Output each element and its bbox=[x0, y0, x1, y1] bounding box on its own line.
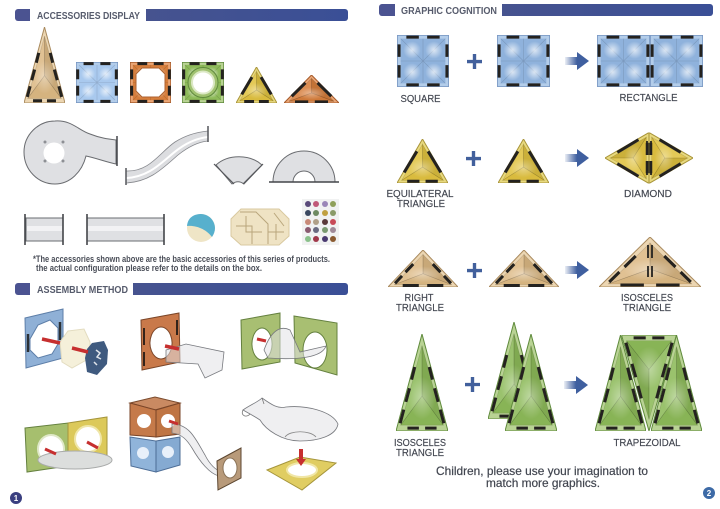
tile: blue square bbox=[76, 62, 118, 103]
label: isosceles triangle: ISOSCELES bbox=[621, 293, 673, 304]
tile: diamond of two triangles bbox=[605, 132, 693, 184]
label: isosceles triangle bbox=[621, 293, 673, 314]
tile: right triangle bbox=[388, 250, 458, 287]
step: orange frame with tube bbox=[141, 313, 224, 378]
tile: green ring frame bbox=[182, 62, 224, 103]
tile: orange right triangle bbox=[284, 75, 339, 103]
accessory: long straight tube bbox=[87, 214, 164, 245]
tile: yellow triangle bbox=[236, 67, 277, 103]
label: diamond: DIAMOND bbox=[624, 189, 672, 200]
panel: accessories display bbox=[15, 9, 348, 273]
label: equilateral triangle: TRIANGLE bbox=[397, 199, 445, 210]
tile: rectangle of two squares bbox=[597, 35, 703, 87]
row: triangles make diamond bbox=[386, 132, 693, 210]
label: equilateral triangle bbox=[386, 189, 454, 210]
label: right triangle: RIGHT bbox=[404, 293, 434, 304]
step: stacked cube with slide bbox=[130, 397, 241, 490]
heading: accessories display: ACCESSORIES DISPLAY bbox=[37, 10, 140, 22]
arrow bbox=[565, 261, 589, 279]
arrow bbox=[564, 376, 588, 394]
label: trapezoidal: TRAPEZOIDAL bbox=[614, 438, 681, 449]
label: isosceles triangle: TRIANGLE bbox=[396, 448, 444, 459]
label: rectangle: RECTANGLE bbox=[620, 93, 678, 104]
label: isosceles triangle bbox=[394, 438, 446, 459]
tile: large isosceles triangle bbox=[599, 237, 701, 287]
label: isosceles triangle: ISOSCELES bbox=[394, 438, 446, 449]
note: configuration disclaimer: *The accessories shown above are the basic accessories of this series of products. bbox=[33, 254, 330, 264]
panel: graphic cognition bbox=[379, 4, 713, 490]
heading: graphic cognition bbox=[379, 4, 713, 17]
tile: tall green triangle bbox=[396, 334, 448, 431]
plus sign bbox=[467, 54, 482, 69]
note: configuration disclaimer: the actual configuration please refer to the details on the box. bbox=[36, 263, 262, 273]
accessory: sticker sheet bbox=[302, 199, 339, 245]
heading: accessories display bbox=[15, 9, 348, 22]
tile: second right triangle bbox=[489, 250, 559, 287]
plus sign bbox=[466, 151, 481, 166]
closing message bbox=[436, 464, 648, 490]
accessory: short straight tube bbox=[25, 214, 63, 245]
heading: assembly method: ASSEMBLY METHOD bbox=[37, 284, 128, 296]
page number 2: 2 bbox=[707, 489, 712, 498]
step: blue frame with cream seal and dark sticker bbox=[25, 309, 108, 375]
heading: graphic cognition: GRAPHIC COGNITION bbox=[401, 5, 497, 17]
accessory: fan curve bbox=[214, 157, 263, 184]
tile: second equilateral triangle bbox=[498, 139, 549, 183]
step: green frames with dish bbox=[241, 313, 337, 375]
tile: square bbox=[397, 35, 449, 87]
row: right triangles make isosceles bbox=[388, 237, 701, 314]
note: configuration disclaimer bbox=[33, 254, 330, 273]
label: isosceles triangle: TRIANGLE bbox=[623, 303, 671, 314]
tile: orange octagon frame bbox=[130, 62, 171, 103]
arrow bbox=[565, 149, 589, 167]
closing message: Children, please use your imagination to bbox=[436, 464, 648, 478]
label: right triangle bbox=[396, 293, 444, 314]
closing message: match more graphics. bbox=[486, 476, 600, 490]
label: right triangle: TRIANGLE bbox=[396, 303, 444, 314]
page number 2 bbox=[703, 487, 715, 499]
plus sign bbox=[465, 377, 480, 392]
label: square: SQUARE bbox=[400, 94, 441, 105]
step: green and yellow frames with dish bbox=[25, 417, 112, 472]
accessory: blue and cream ball bbox=[187, 214, 215, 242]
arrow bbox=[565, 52, 589, 70]
accessory: maze board bbox=[231, 209, 289, 245]
panel: assembly method bbox=[15, 283, 348, 490]
tile: trapezoid of three triangles bbox=[595, 335, 702, 431]
row: tall triangles make trapezoid bbox=[394, 322, 702, 459]
tile: second square bbox=[497, 35, 550, 87]
step: funnel bowl onto yellow base bbox=[242, 398, 338, 490]
plus sign bbox=[467, 263, 482, 278]
label: equilateral triangle: EQUILATERAL bbox=[386, 189, 454, 200]
tile: two overlapping green triangles bbox=[488, 322, 557, 431]
accessory: curved slide bbox=[126, 126, 208, 185]
row: square plus square makes rectangle bbox=[397, 35, 703, 105]
page number 1: 1 bbox=[14, 494, 19, 503]
accessory: large funnel bbox=[24, 121, 117, 184]
tile: tall tan triangle bbox=[24, 27, 65, 103]
page number 1 bbox=[10, 492, 22, 504]
accessory: arch tube bbox=[269, 151, 339, 182]
tile: equilateral triangle bbox=[397, 139, 448, 183]
heading: assembly method bbox=[15, 283, 348, 296]
